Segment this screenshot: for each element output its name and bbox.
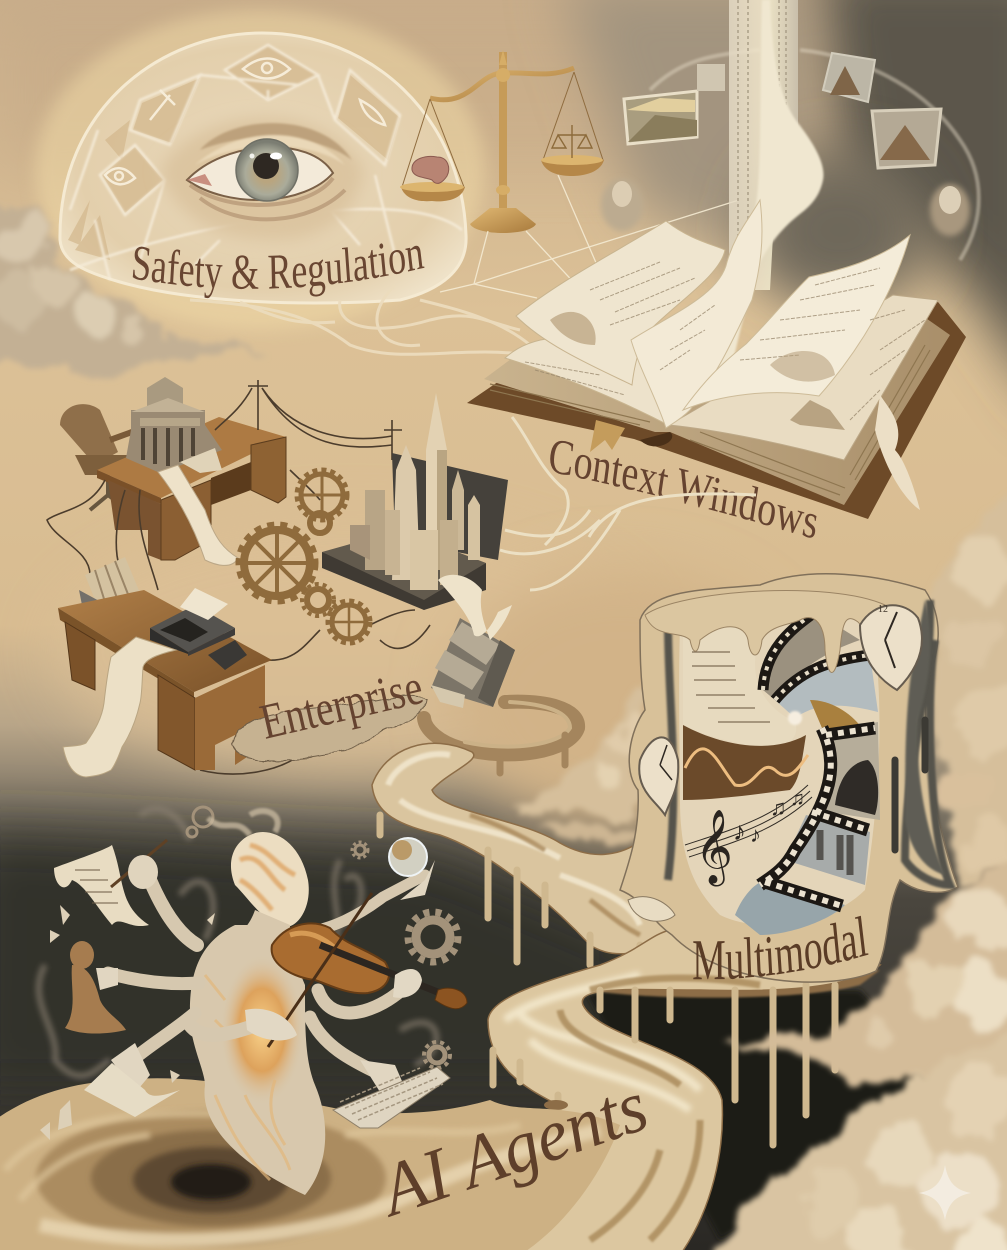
head — [231, 832, 309, 927]
scales of justice — [400, 50, 604, 233]
drips — [380, 815, 640, 965]
document swirl — [683, 612, 796, 750]
rock ledge — [232, 696, 427, 760]
top drips — [645, 591, 886, 672]
cloud: left — [0, 203, 275, 373]
title: multimodal: Multimodal — [693, 916, 868, 980]
page block — [484, 300, 950, 505]
lower drips — [493, 985, 835, 1145]
curling paper — [438, 575, 512, 640]
office chair — [60, 404, 135, 510]
dark void under the stream — [585, 990, 960, 1240]
melting frame — [620, 574, 958, 982]
bookmark ribbons — [590, 420, 625, 452]
typewriter — [150, 588, 247, 670]
swirl eye — [788, 711, 802, 725]
melting clock: top right — [860, 604, 922, 690]
network lines — [440, 175, 739, 302]
title: safety and regulation: Safety & Regulation — [132, 243, 424, 298]
music staff: ♫ — [790, 788, 805, 810]
memory arc — [650, 50, 979, 260]
upper left leaf — [516, 221, 725, 385]
miniature bank building — [126, 377, 222, 473]
briefcase with city — [322, 393, 508, 610]
surveillance dome — [60, 33, 466, 303]
left lower page — [505, 338, 668, 425]
center curling page — [631, 200, 762, 428]
sound wave — [683, 725, 806, 800]
title: context windows: Context Windows — [550, 440, 816, 538]
page sketches — [550, 312, 596, 345]
music staff: ♫ — [770, 795, 786, 820]
desk scroll — [158, 465, 238, 565]
cloud: right — [520, 490, 1007, 890]
dome panels — [68, 45, 400, 260]
panel: enterprise — [47, 377, 515, 777]
right leaf — [683, 235, 910, 410]
floating ribbon — [700, 0, 823, 400]
document text — [692, 652, 770, 722]
roots — [500, 417, 756, 590]
smoke swirls — [39, 809, 436, 1076]
brown upper stream — [424, 702, 578, 773]
spine — [640, 432, 672, 446]
scroll and quill — [54, 840, 167, 926]
melting clock: left — [639, 737, 678, 815]
glowing orb — [389, 838, 427, 876]
paper fragments — [40, 905, 215, 1140]
panel: ai agents — [0, 807, 658, 1250]
title: ai agents: AI Agents — [366, 1065, 658, 1234]
filing cabinet — [431, 618, 515, 708]
melting clock: top right: 12 — [878, 604, 888, 615]
flowing body — [190, 925, 325, 1195]
melting river — [372, 702, 880, 1250]
cover — [467, 302, 966, 519]
file box — [79, 557, 147, 625]
keyboard — [333, 1067, 450, 1128]
lower desk — [58, 590, 272, 770]
panel: multimodal — [619, 573, 959, 983]
music staff — [685, 785, 812, 887]
music staff: ♪ — [750, 822, 761, 847]
light column — [729, 0, 798, 290]
film strip and photos — [735, 612, 880, 935]
arms — [108, 875, 425, 1075]
paper scroll — [63, 637, 176, 777]
panel: context windows — [467, 0, 982, 592]
frame shadows — [668, 600, 950, 885]
violin — [245, 893, 467, 1047]
neural roots — [190, 285, 530, 355]
portraits — [601, 179, 970, 236]
cloud: lower bottom-right — [700, 1030, 1007, 1250]
inner scene — [679, 606, 879, 925]
torn page — [84, 1063, 180, 1117]
melted clock: bottom — [628, 897, 675, 921]
brain — [412, 156, 449, 183]
cloud: upper bottom-right — [725, 850, 1007, 1085]
dome small eyes — [105, 58, 385, 184]
right base page — [669, 295, 938, 460]
utility poles and wires — [47, 380, 430, 774]
title: enterprise: Enterprise — [255, 659, 428, 750]
clay figure — [65, 941, 126, 1034]
S-curve stream — [400, 930, 880, 1250]
dome lattice — [70, 45, 462, 280]
memory images — [624, 53, 941, 168]
hands — [96, 860, 435, 1100]
music staff: 𝄞 — [695, 811, 733, 887]
panel: safety and regulation — [58, 32, 604, 356]
text columns on column — [738, 0, 786, 280]
upper desk — [97, 417, 286, 560]
sand vortex — [0, 1078, 620, 1250]
cream wedge — [372, 743, 672, 954]
main eye — [160, 117, 365, 241]
gears — [239, 470, 370, 643]
background gears — [187, 807, 458, 1068]
text lines — [525, 262, 925, 420]
open book — [467, 200, 966, 519]
arches under platform — [590, 970, 880, 998]
icon: four-point star watermark — [919, 1165, 971, 1220]
music staff: ♪ — [733, 817, 746, 846]
skyline — [350, 393, 480, 590]
